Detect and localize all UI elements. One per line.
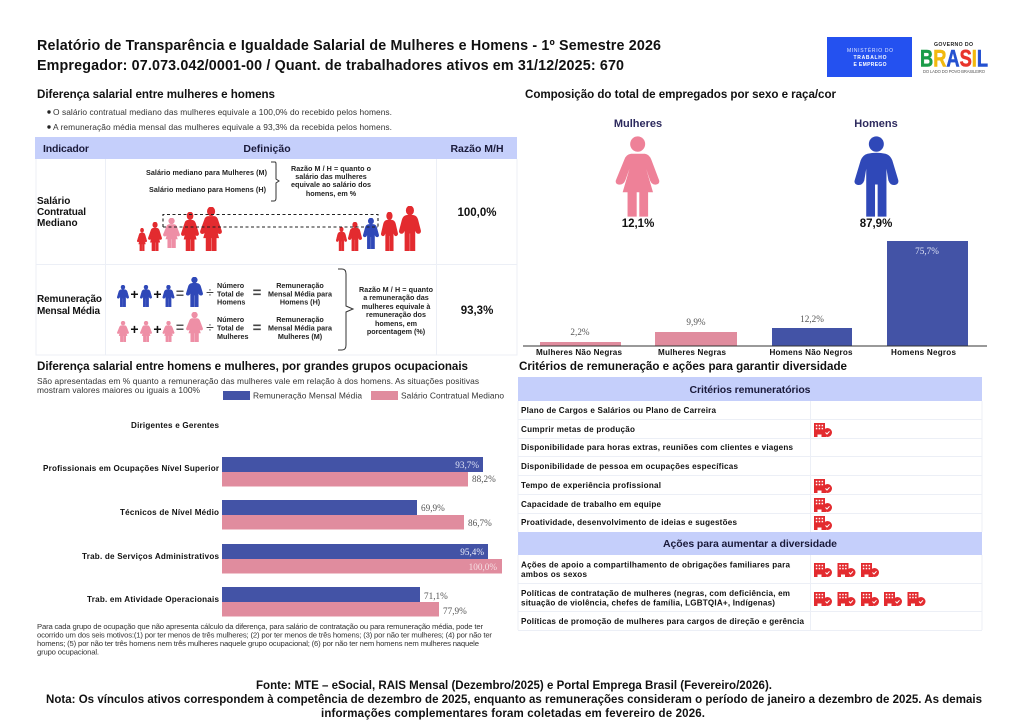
heading: Composição do total de empregados por sexo e raça/cor — [525, 88, 836, 101]
icon: mulheres: 12,1% — [622, 218, 654, 230]
table: ações para aumentar a diversidade: Ações de apoio a compartilhamento de obrigações familiares para — [521, 560, 790, 570]
text block: resumo — [47, 107, 392, 132]
bar chart: grupos ocupacionais: 77,9% — [443, 606, 467, 616]
row: remuneração mensal média: Razão M / H = quanto — [359, 285, 434, 294]
row: remuneração mensal média: Mensal Média para — [268, 290, 333, 298]
logo: ministério e governo: E EMPREGO — [854, 62, 887, 68]
bar chart: grupos ocupacionais: 100,0% — [469, 562, 497, 572]
icon: homens: Homens — [854, 118, 898, 130]
bar chart: grupos ocupacionais: 69,9% — [421, 503, 445, 513]
panel: critérios de remuneração e ações — [518, 360, 982, 630]
panel: composição do total de empregados — [523, 88, 987, 357]
row: remuneração mensal média: Remuneração — [276, 281, 324, 290]
row: salário contratual mediano: homens, em % — [306, 189, 357, 198]
row: remuneração mensal média: mulheres equivale à — [362, 302, 431, 311]
icons: fórmula homens — [117, 277, 203, 307]
table: ações para aumentar a diversidade: situação de violência, chefes de família, LGBTQIA+, Indígenas) — [521, 598, 775, 608]
mediana: retângulo tracejado — [163, 214, 378, 227]
bar chart: grupos ocupacionais: 93,7% — [455, 460, 479, 470]
logo: ministério e governo: MINISTÉRIO DO — [847, 47, 893, 54]
row: remuneração mensal média: remuneração dos — [366, 310, 426, 319]
bar chart: sexo e raça/cor: Homens Não Negros — [770, 348, 853, 357]
operadores: = — [253, 320, 262, 336]
bar chart: sexo e raça/cor: Homens Negros — [891, 348, 956, 357]
table header: Razão M/H — [450, 143, 504, 155]
row: remuneração mensal média: homens, em — [375, 319, 417, 328]
row: remuneração mensal média: Mensal Média para — [268, 324, 333, 332]
table header: Indicador — [43, 143, 89, 155]
title: Empregador: 07.073.042/0001-00 / Quant. de trabalhadores ativos em 31/12/2025: 670 — [37, 58, 624, 74]
footer: fonte e nota: informações complementares foram coletadas em fevereiro de 2026. — [321, 708, 705, 720]
operadores: + — [130, 321, 139, 337]
logo: ministério e governo: GOVERNO DO — [934, 42, 973, 48]
row: remuneração mensal média: Homens — [217, 298, 245, 306]
row: remuneração mensal média: porcentagem (%) — [367, 327, 426, 336]
row: salário contratual mediano: Razão M / H = quanto o — [291, 164, 372, 173]
table: ações para aumentar a diversidade: Políticas de contratação de mulheres (negras, com deficiência, em — [521, 589, 790, 598]
text block: explicação — [37, 376, 479, 395]
table: critérios remuneratórios: Plano de Cargos e Salários ou Plano de Carreira — [521, 406, 716, 415]
bar chart: grupos ocupacionais: Trab. de Serviços Administrativos — [82, 552, 219, 561]
icon: homens: 87,9% — [860, 218, 892, 230]
bar chart: grupos ocupacionais: Técnicos de Nível Médio — [120, 508, 219, 517]
icons: fórmula mulheres — [117, 312, 203, 342]
operadores: + — [153, 321, 162, 337]
table: critérios remuneratórios: Cumprir metas de produção — [521, 425, 635, 434]
row: remuneração mensal média: Homens (H) — [280, 298, 321, 306]
icon: mulheres — [614, 118, 662, 230]
table header: Definição — [243, 143, 291, 155]
text block: resumo: A remuneração média mensal das mulheres equivale a 93,3% da recebida pelos homens. — [53, 122, 392, 132]
row: remuneração mensal média: Número — [217, 315, 245, 324]
row: salário contratual mediano: Salário mediano para Homens (H) — [149, 185, 267, 194]
icon: mulheres: Mulheres — [614, 118, 662, 130]
table: critérios remuneratórios: Proatividade, desenvolvimento de ideias e sugestões — [521, 518, 737, 527]
bar chart: sexo e raça/cor: 9,9% — [686, 317, 706, 327]
bar chart: grupos ocupacionais: Profissionais em Ocupações Nível Superior — [43, 464, 220, 473]
row: salário contratual mediano: Contratual — [37, 207, 86, 218]
table: ações para aumentar a diversidade: ambos os sexos — [521, 570, 587, 579]
operadores: = — [176, 319, 184, 335]
icons: empresas — [814, 423, 832, 530]
heading: Critérios de remuneração e ações para garantir diversidade — [519, 360, 848, 373]
row: salário contratual mediano — [37, 162, 497, 251]
row: remuneração mensal média — [37, 269, 493, 350]
row: salário contratual mediano: Salário — [37, 196, 70, 207]
logo: ministério e governo — [827, 37, 988, 77]
table: critérios remuneratórios: Disponibilidade para horas extras, reuniões com clientes e viagens — [521, 443, 793, 452]
row: remuneração mensal média: Total de — [217, 290, 244, 298]
operadores: ÷ — [206, 284, 214, 300]
text block: explicação: São apresentadas em % quanto a remuneração das mulheres vale em relação à dos homens. As situações positivas — [37, 376, 479, 386]
bar chart: grupos ocupacionais: Dirigentes e Gerentes — [131, 421, 219, 430]
bar chart: grupos ocupacionais: 71,1% — [424, 591, 448, 601]
row: remuneração mensal média: Remuneração — [276, 315, 324, 324]
bar chart: sexo e raça/cor: 75,7% — [915, 246, 939, 256]
table: critérios remuneratórios — [518, 377, 982, 532]
logo: ministério e governo: TRABALHO — [854, 55, 887, 61]
brace — [271, 162, 279, 201]
operadores: = — [176, 285, 184, 301]
table header — [35, 137, 517, 159]
bar chart: sexo e raça/cor: 2,2% — [570, 327, 590, 337]
row: remuneração mensal média: Número — [217, 281, 245, 290]
table: ações para aumentar a diversidade — [518, 532, 982, 630]
icons: mulheres ordenadas — [137, 207, 221, 251]
text block: nota metodológica: homens; (5) por não ter três homens nem três mulheres naquele grupo ocupacional; (6) por não ter nem homens nem mulheres naquele — [37, 639, 479, 648]
row: remuneração mensal média: 93,3% — [461, 305, 493, 317]
heading: Diferença salarial entre homens e mulheres, por grandes grupos ocupacionais — [37, 360, 468, 373]
table: critérios remuneratórios: Tempo de experiência profissional — [521, 481, 661, 490]
row: remuneração mensal média: Mulheres — [217, 332, 249, 341]
icons: homens ordenados — [336, 206, 420, 251]
text block: explicação: mostram valores maiores ou iguais a 100% — [37, 385, 201, 395]
bar chart: grupos ocupacionais: Trab. em Atividade Operacionais — [87, 595, 219, 604]
operadores: + — [153, 286, 162, 302]
row: salário contratual mediano: Salário mediano para Mulheres (M) — [146, 168, 268, 177]
table: ações para aumentar a diversidade: Políticas de promoção de mulheres para cargos de direção e gerência — [521, 617, 804, 626]
table: critérios remuneratórios: Critérios remuneratórios — [690, 384, 811, 396]
bar chart: grupos ocupacionais: 88,2% — [472, 474, 496, 484]
bar chart: sexo e raça/cor — [523, 241, 987, 357]
bar chart: grupos ocupacionais: 95,4% — [460, 547, 484, 557]
row: remuneração mensal média: Remuneração — [37, 294, 102, 305]
table: critérios remuneratórios: Capacidade de trabalho em equipe — [521, 500, 661, 509]
footer: fonte e nota: Fonte: MTE – eSocial, RAIS Mensal (Dezembro/2025) e Portal Emprega Brasil (Fevereiro/2026). — [256, 680, 772, 692]
row: salário contratual mediano: Mediano — [37, 218, 78, 229]
operadores: = — [253, 284, 262, 302]
footer: fonte e nota — [46, 680, 982, 720]
row: salário contratual mediano: salário das mulheres — [295, 172, 367, 181]
bar chart: sexo e raça/cor: 12,2% — [800, 314, 824, 324]
panel: diferença por grupos ocupacionais — [37, 360, 504, 656]
bar chart: sexo e raça/cor: Mulheres Não Negras — [536, 348, 622, 357]
text block: nota metodológica: grupo ocupacional. — [37, 648, 99, 656]
legend — [223, 390, 504, 400]
row: remuneração mensal média: a remuneração das — [363, 293, 429, 302]
table: ações para aumentar a diversidade: Ações para aumentar a diversidade — [663, 538, 837, 550]
operadores — [130, 284, 262, 337]
operadores: ÷ — [206, 319, 214, 335]
bar chart: grupos ocupacionais: 86,7% — [468, 518, 492, 528]
bar chart: sexo e raça/cor: Mulheres Negras — [658, 348, 726, 357]
row: salário contratual mediano: 100,0% — [457, 207, 497, 219]
footer: fonte e nota: Nota: Os vínculos ativos correspondem à competência de dezembro de 2025, enquanto as remunerações consideram o período de janeiro a dezembro de 2025. As demais — [46, 694, 982, 706]
row: remuneração mensal média: Mulheres (M) — [278, 332, 323, 341]
bar chart: grupos ocupacionais — [43, 421, 502, 616]
title — [37, 38, 661, 74]
row: remuneração mensal média: Total de — [217, 324, 244, 332]
legend: Remuneração Mensal Média — [253, 390, 362, 400]
heading: Diferença salarial entre mulheres e homens — [37, 88, 275, 101]
row: remuneração mensal média: Mensal Média — [37, 306, 100, 317]
text block: nota metodológica — [37, 622, 492, 656]
logo: ministério e governo: DO LADO DO POVO BRASILEIRO — [923, 69, 986, 74]
legend: Salário Contratual Mediano — [401, 390, 504, 400]
icons: empresas — [814, 563, 926, 606]
row: salário contratual mediano: equivale ao salário dos — [291, 180, 371, 189]
title: Relatório de Transparência e Igualdade Salarial de Mulheres e Homens - 1º Semestre 2026 — [37, 38, 661, 54]
text block: resumo: O salário contratual mediano das mulheres equivale a 100,0% do recebido pelos homens. — [53, 107, 392, 117]
panel: diferença salarial entre mulheres e homens — [35, 88, 517, 355]
text block: nota metodológica: Para cada grupo de ocupação que não apresenta cálculo da diferença, para salário de contratação ou para remuneração média, pode ter — [37, 622, 483, 631]
text block: nota metodológica: ocorrido um dos seis motivos:(1) por ter menos de três mulheres; (2) por ter menos de três homens; (3) por não ter mulheres; (4) por não ter — [37, 630, 492, 640]
logo: ministério e governo: BRASIL — [920, 46, 988, 72]
brace — [338, 269, 353, 350]
icon: homens — [854, 118, 898, 230]
table: critérios remuneratórios: Disponibilidade de pessoa em ocupações específicas — [521, 462, 738, 471]
operadores: + — [130, 286, 139, 302]
